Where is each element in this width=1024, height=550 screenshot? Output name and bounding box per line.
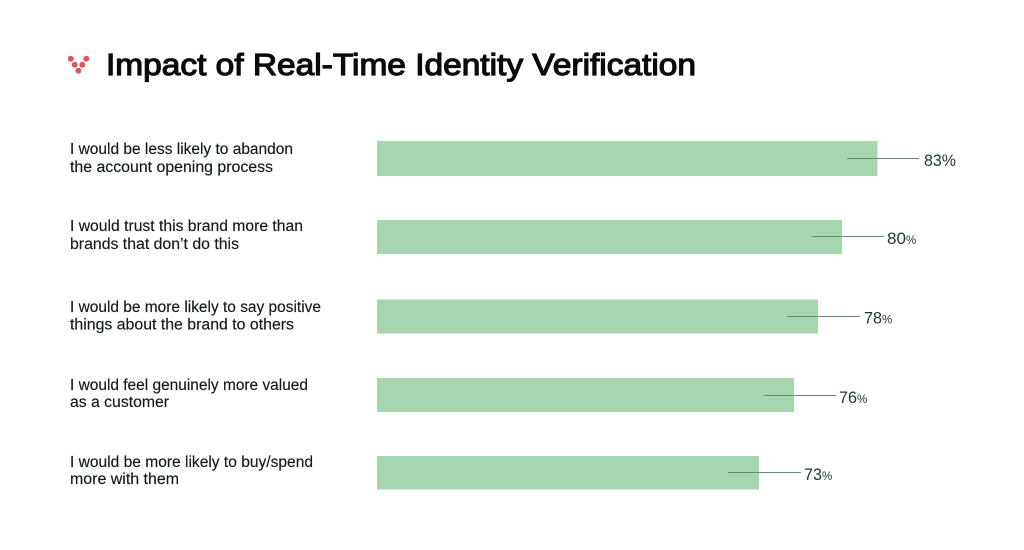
- row 4: valued customer: [70, 377, 867, 412]
- row 4 label: as a customer: [70, 394, 169, 411]
- row 4 label: I would feel genuinely more valued: [70, 377, 308, 394]
- row 3: positive things: [70, 299, 892, 334]
- row 5 label: [70, 454, 313, 488]
- row 5 label: I would be more likely to buy/spend: [70, 454, 313, 471]
- row 5 bar: [377, 456, 759, 490]
- row 4 value: 76%: [839, 389, 867, 407]
- row 1 leader line: [847, 158, 919, 160]
- row 4 leader line: [764, 394, 836, 396]
- row 2 label: I would trust this brand more than: [70, 218, 303, 235]
- row 1 value: 83%: [924, 152, 956, 170]
- row 2 label: brands that don’t do this: [70, 236, 239, 253]
- row 2 leader line: [812, 236, 884, 238]
- row 1 label: [70, 141, 293, 176]
- row 3 value: 78%: [864, 310, 892, 328]
- row 3 label: [70, 299, 321, 334]
- row 2 value: 80%: [887, 230, 916, 248]
- row 1: abandon process: [70, 141, 956, 176]
- title: Impact of Real-Time Identity Verification: [106, 47, 696, 82]
- row 1 bar: [377, 141, 878, 176]
- row 1 label: I would be less likely to abandon: [70, 141, 293, 158]
- row 1 label: the account opening process: [70, 159, 273, 176]
- row 2 label: [70, 218, 303, 253]
- row 3 label: I would be more likely to say positive: [70, 299, 321, 316]
- row 5: buy and spend: [70, 454, 832, 490]
- icon: red dots logo: [68, 56, 89, 74]
- row 2: trust brand: [70, 218, 916, 254]
- row 3 label: things about the brand to others: [70, 316, 294, 334]
- row 4 label: [70, 377, 308, 411]
- row 3 bar: [377, 300, 818, 334]
- row 5 label: more with them: [70, 471, 179, 488]
- row 5 value: 73%: [804, 466, 832, 484]
- row 4 bar: [377, 378, 794, 412]
- row 5 leader line: [728, 472, 801, 474]
- row 3 leader line: [787, 316, 860, 318]
- row 2 bar: [377, 220, 842, 254]
